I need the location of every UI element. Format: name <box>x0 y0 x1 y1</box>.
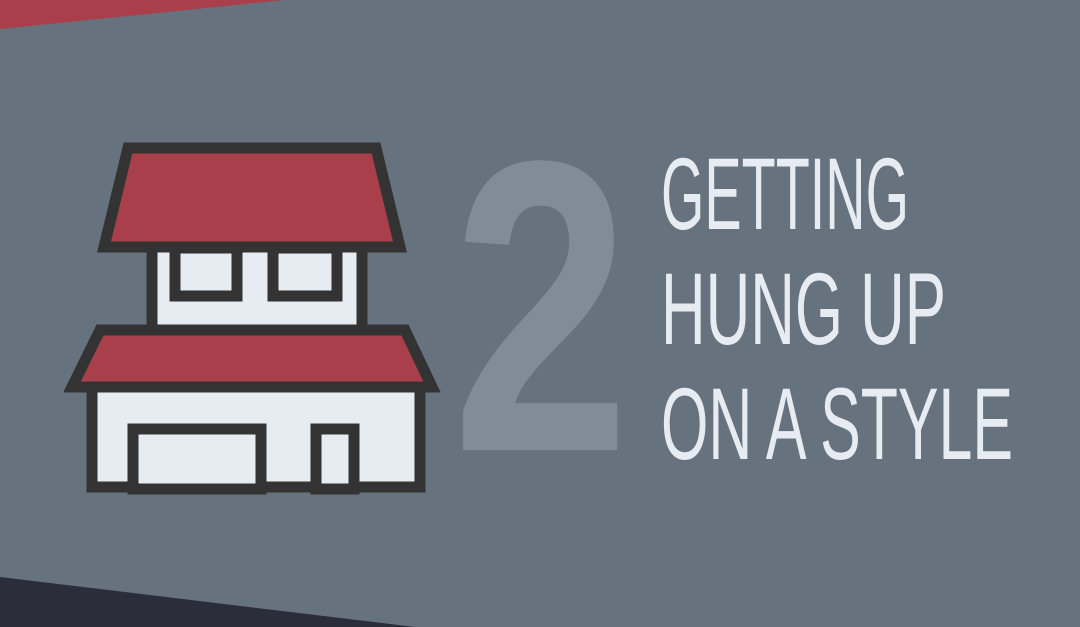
door <box>316 429 354 489</box>
windows <box>175 248 237 296</box>
lower body <box>92 385 420 487</box>
garage door <box>133 429 261 489</box>
icon: house <box>72 148 432 489</box>
bottom dark band <box>0 577 415 627</box>
lower roof <box>72 330 432 387</box>
upper body <box>152 245 362 335</box>
top red band <box>0 0 285 29</box>
heading: Getting hung up on a style <box>661 137 1013 481</box>
upper roof <box>104 148 400 247</box>
big number 2: 2 <box>452 74 630 538</box>
